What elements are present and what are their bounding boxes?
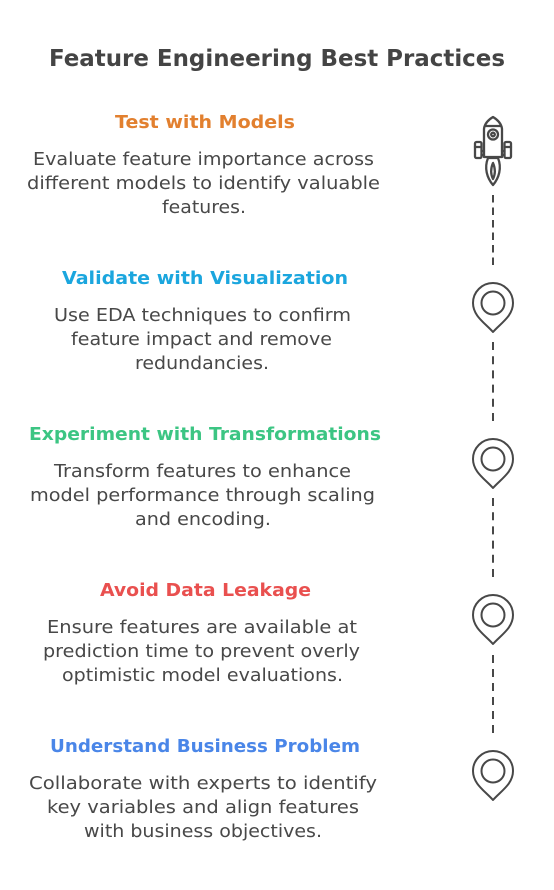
step: Understand Business Problem (29, 736, 377, 842)
step: Avoid Data Leakage (43, 580, 360, 686)
timeline: dashed connectors (492, 195, 494, 733)
icon: rocket (475, 117, 511, 185)
text: Experiment with Transformations description: Transform features to enhance (53, 461, 351, 482)
icon: pin 3 (473, 595, 513, 644)
icon: pin 1 (473, 283, 513, 332)
text: Understand Business Problem description: key variables and align features (47, 797, 359, 818)
icon: pin 4 (473, 751, 513, 800)
text: Validate with Visualization description: feature impact and remove (71, 329, 332, 350)
text: Understand Business Problem description (29, 773, 377, 842)
step: Experiment with Transformations (29, 424, 381, 530)
heading: Validate with Visualization: Validate with Visualization (62, 268, 348, 289)
text: Avoid Data Leakage description: optimistic model evaluations. (62, 665, 343, 686)
text: Validate with Visualization description: Use EDA techniques to confirm (54, 305, 351, 326)
heading: Experiment with Transformations: Experiment with Transformations (29, 424, 381, 445)
text: Avoid Data Leakage description (43, 617, 360, 686)
icon: pin 2 (473, 439, 513, 488)
text: Understand Business Problem description: Collaborate with experts to identify (29, 773, 377, 794)
text: Test with Models description: Evaluate feature importance across (33, 149, 374, 170)
text: Validate with Visualization description (54, 305, 351, 374)
text: Understand Business Problem description: with business objectives. (84, 821, 322, 842)
text: Experiment with Transformations description: model performance through scaling (30, 485, 375, 506)
text: Test with Models description: different models to identify valuable (27, 173, 380, 194)
text: Avoid Data Leakage description: Ensure features are available at (47, 617, 357, 638)
step: Validate with Visualization (54, 268, 351, 374)
text: Experiment with Transformations description: and encoding. (135, 509, 271, 530)
step: Test with Models (27, 112, 380, 218)
text: Validate with Visualization description: redundancies. (135, 353, 269, 374)
heading: Understand Business Problem: Understand Business Problem (50, 736, 360, 757)
text: Test with Models description: features. (162, 197, 246, 218)
text: Test with Models description (27, 149, 380, 218)
heading: Test with Models: Test with Models (115, 112, 295, 133)
text: Avoid Data Leakage description: prediction time to prevent overly (43, 641, 360, 662)
text: Experiment with Transformations description (30, 461, 375, 530)
heading: Avoid Data Leakage: Avoid Data Leakage (100, 580, 311, 601)
title: Feature Engineering Best Practices (49, 46, 505, 72)
